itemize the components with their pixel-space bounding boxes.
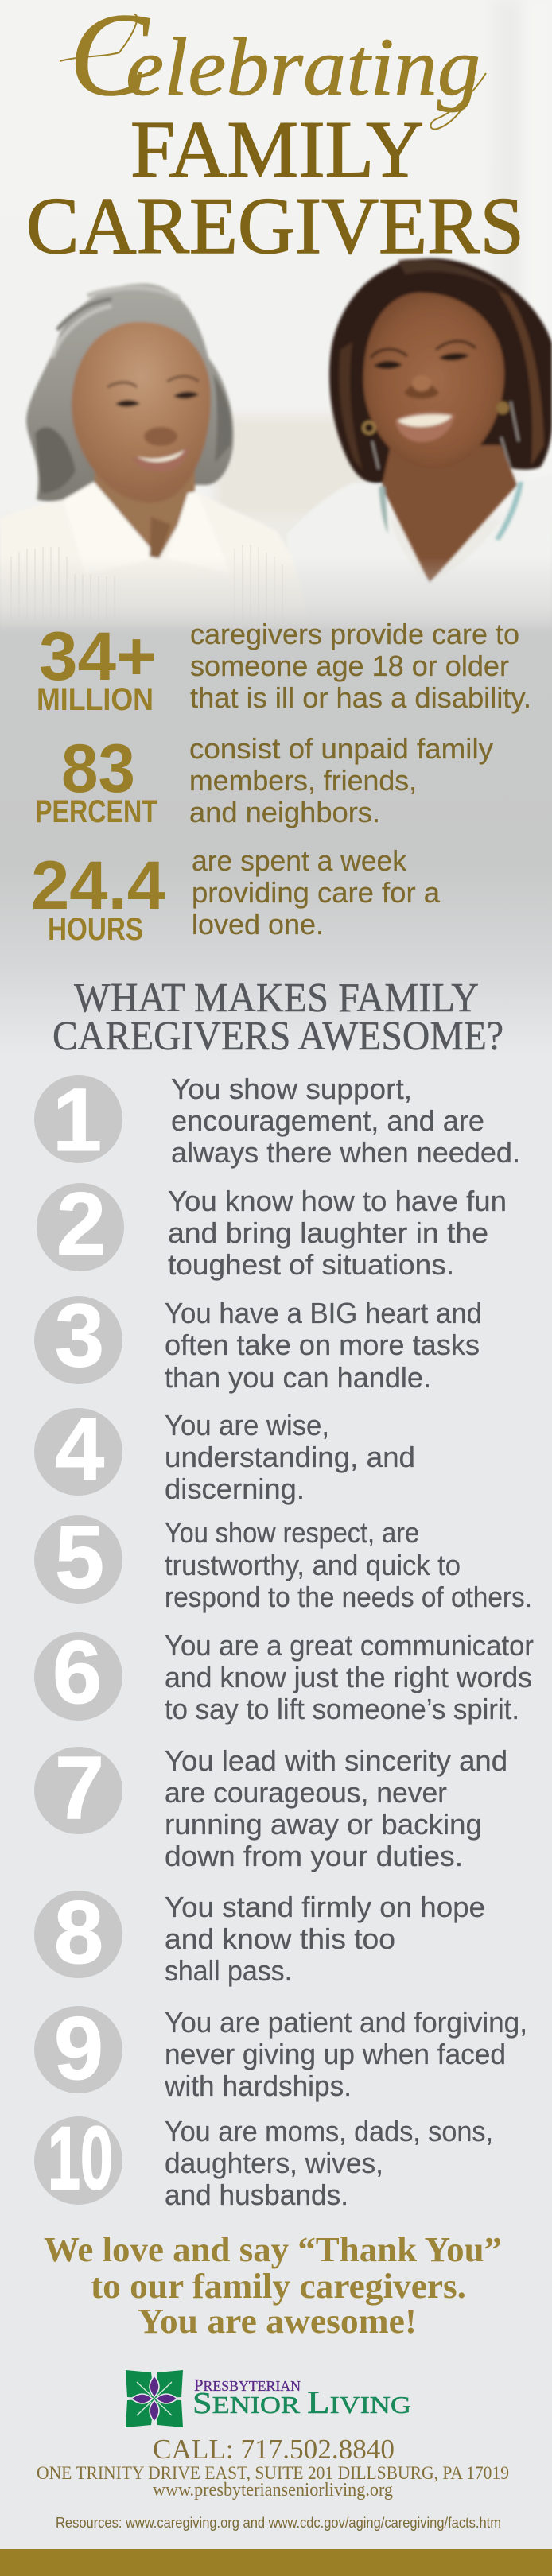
logo wordmark: Presbyterian: PRESBYTERIAN bbox=[194, 2376, 301, 2395]
title script line: elebrating bbox=[126, 21, 480, 113]
resources line: Resources: www.caregiving.org and www.cdc.gov/aging/caregiving/facts.htm bbox=[56, 2515, 501, 2531]
number badge 4 bbox=[34, 1399, 122, 1499]
number badge 1: 1 bbox=[52, 1070, 102, 1170]
item 7: are courageous, never bbox=[165, 1776, 447, 1809]
item 4: You are wise, bbox=[165, 1409, 329, 1441]
number badge 10: 10 bbox=[48, 2109, 113, 2208]
stat: 24.4 hours bbox=[31, 844, 441, 947]
item 3 bbox=[34, 1286, 482, 1394]
item 7: running away or backing bbox=[165, 1808, 482, 1841]
item 9: with hardships. bbox=[164, 2070, 352, 2102]
item 7 bbox=[34, 1738, 507, 1872]
heading: what makes family caregivers awesome: WHAT MAKES FAMILY bbox=[74, 976, 479, 1021]
right woman bbox=[287, 258, 552, 628]
item 1: always there when needed. bbox=[171, 1136, 520, 1169]
shirt pleats bbox=[11, 545, 282, 620]
stat: 34+ million bbox=[37, 618, 531, 717]
item 9: never giving up when faced bbox=[165, 2038, 506, 2070]
item 3: You have a BIG heart and bbox=[165, 1297, 482, 1329]
number badge 3: 3 bbox=[55, 1286, 104, 1385]
stat: 34+ million: 34+ bbox=[39, 619, 157, 695]
number badge 6 bbox=[34, 1623, 122, 1722]
number badge 7: 7 bbox=[55, 1738, 104, 1837]
item 1 bbox=[34, 1070, 520, 1170]
item 3: often take on more tasks bbox=[165, 1329, 480, 1361]
stat: 24.4 hours: providing care for a bbox=[192, 876, 441, 909]
item 4: discerning. bbox=[165, 1472, 305, 1505]
stat: 24.4 hours: 24.4 bbox=[31, 848, 165, 924]
number badge 8: 8 bbox=[54, 1883, 103, 1982]
website: www.presbyterianseniorliving.org bbox=[153, 2480, 393, 2500]
stat: 24.4 hours: loved one. bbox=[192, 908, 324, 941]
number badge 5: 5 bbox=[55, 1507, 104, 1607]
thank you message: to our family caregivers. bbox=[91, 2267, 466, 2306]
item 1: You show support, bbox=[171, 1073, 412, 1105]
item 6 bbox=[34, 1623, 534, 1725]
number badge 2: 2 bbox=[56, 1174, 106, 1274]
stat: 34+ million: that is ill or has a disability. bbox=[190, 681, 531, 714]
title line FAMILY: FAMILY bbox=[130, 105, 424, 195]
item 7: You lead with sincerity and bbox=[165, 1744, 507, 1777]
photo: two smiling women bbox=[0, 0, 552, 652]
thank you message: You are awesome! bbox=[138, 2302, 417, 2341]
item 10: You are moms, dads, sons, bbox=[165, 2115, 493, 2147]
item 5: trustworthy, and quick to bbox=[165, 1549, 461, 1581]
number badge 1 bbox=[34, 1070, 122, 1170]
item 2: toughest of situations. bbox=[168, 1248, 454, 1281]
stat: 34+ million: someone age 18 or older bbox=[190, 650, 509, 682]
stat: 83 percent: consist of unpaid family bbox=[189, 732, 493, 765]
thank you message: We love and say “Thank You” bbox=[44, 2230, 502, 2269]
item 8 bbox=[34, 1883, 485, 1987]
footer bar bbox=[0, 2549, 552, 2576]
item 1: encouragement, and are bbox=[171, 1104, 484, 1137]
number badge 8 bbox=[34, 1883, 122, 1982]
item 5: You show respect, are bbox=[165, 1516, 419, 1549]
number badge 10 bbox=[34, 2109, 122, 2208]
item 5 bbox=[34, 1507, 532, 1613]
item 9: You are patient and forgiving, bbox=[165, 2006, 527, 2039]
item 4: understanding, and bbox=[165, 1441, 415, 1473]
item 6: to say to lift someone’s spirit. bbox=[165, 1693, 519, 1725]
item 5: respond to the needs of others. bbox=[165, 1581, 532, 1613]
item 7: down from your duties. bbox=[165, 1840, 463, 1872]
logo: Presbyterian Senior Living bbox=[126, 2370, 411, 2427]
stat: 83 percent: members, friends, bbox=[189, 764, 417, 797]
stat: 83 percent: 83 bbox=[61, 731, 135, 807]
item 10 bbox=[34, 2109, 493, 2211]
item 4 bbox=[34, 1399, 415, 1505]
number badge 6: 6 bbox=[52, 1623, 102, 1722]
item 2 bbox=[37, 1174, 507, 1281]
stat: 83 percent bbox=[35, 731, 493, 829]
number badge 7 bbox=[34, 1738, 122, 1837]
stat: 83 percent: PERCENT bbox=[35, 794, 157, 829]
thank you message bbox=[44, 2230, 502, 2341]
icon: four leaf flower bbox=[126, 2370, 183, 2427]
photo fade into grey bbox=[0, 557, 552, 652]
heading: what makes family caregivers awesome: CAREGIVERS AWESOME? bbox=[52, 1014, 503, 1059]
item 6: You are a great communicator bbox=[165, 1629, 534, 1662]
number badge 3 bbox=[34, 1286, 122, 1385]
number badge 9 bbox=[34, 1999, 122, 2098]
stat: 83 percent: and neighbors. bbox=[189, 796, 380, 828]
number badge 9: 9 bbox=[54, 1999, 103, 2098]
item 10: and husbands. bbox=[165, 2178, 348, 2211]
item 9 bbox=[34, 1999, 527, 2102]
contact details bbox=[37, 2434, 509, 2500]
title line CAREGIVERS: CAREGIVERS bbox=[26, 181, 524, 271]
item 2: and bring laughter in the bbox=[168, 1216, 488, 1249]
number badge 2 bbox=[37, 1174, 124, 1274]
item 2: You know how to have fun bbox=[168, 1185, 507, 1217]
item 3: than you can handle. bbox=[165, 1361, 431, 1394]
left woman bbox=[0, 284, 309, 628]
heading: what makes family caregivers awesome bbox=[52, 976, 503, 1059]
number badge 5 bbox=[34, 1507, 122, 1607]
number badge 4: 4 bbox=[55, 1399, 104, 1499]
item 8: and know this too bbox=[165, 1922, 395, 1955]
item 6: and know just the right words bbox=[165, 1661, 532, 1693]
logo wordmark: Senior Living: SENIOR LIVING bbox=[192, 2384, 411, 2420]
item 8: You stand firmly on hope bbox=[165, 1891, 485, 1923]
stat: 34+ million: caregivers provide care to bbox=[190, 618, 519, 650]
item 8: shall pass. bbox=[165, 1954, 292, 1987]
title bbox=[26, 0, 524, 271]
stat: 24.4 hours: are spent a week bbox=[192, 844, 407, 877]
phone number: CALL: 717.502.8840 bbox=[153, 2434, 395, 2465]
stat: 24.4 hours: HOURS bbox=[48, 912, 143, 947]
item 10: daughters, wives, bbox=[165, 2147, 383, 2179]
title script line bbox=[60, 0, 486, 130]
stat: 34+ million: MILLION bbox=[37, 682, 154, 717]
address: ONE TRINITY DRIVE EAST, SUITE 201 DILLSBURG, PA 17019 bbox=[37, 2463, 509, 2483]
